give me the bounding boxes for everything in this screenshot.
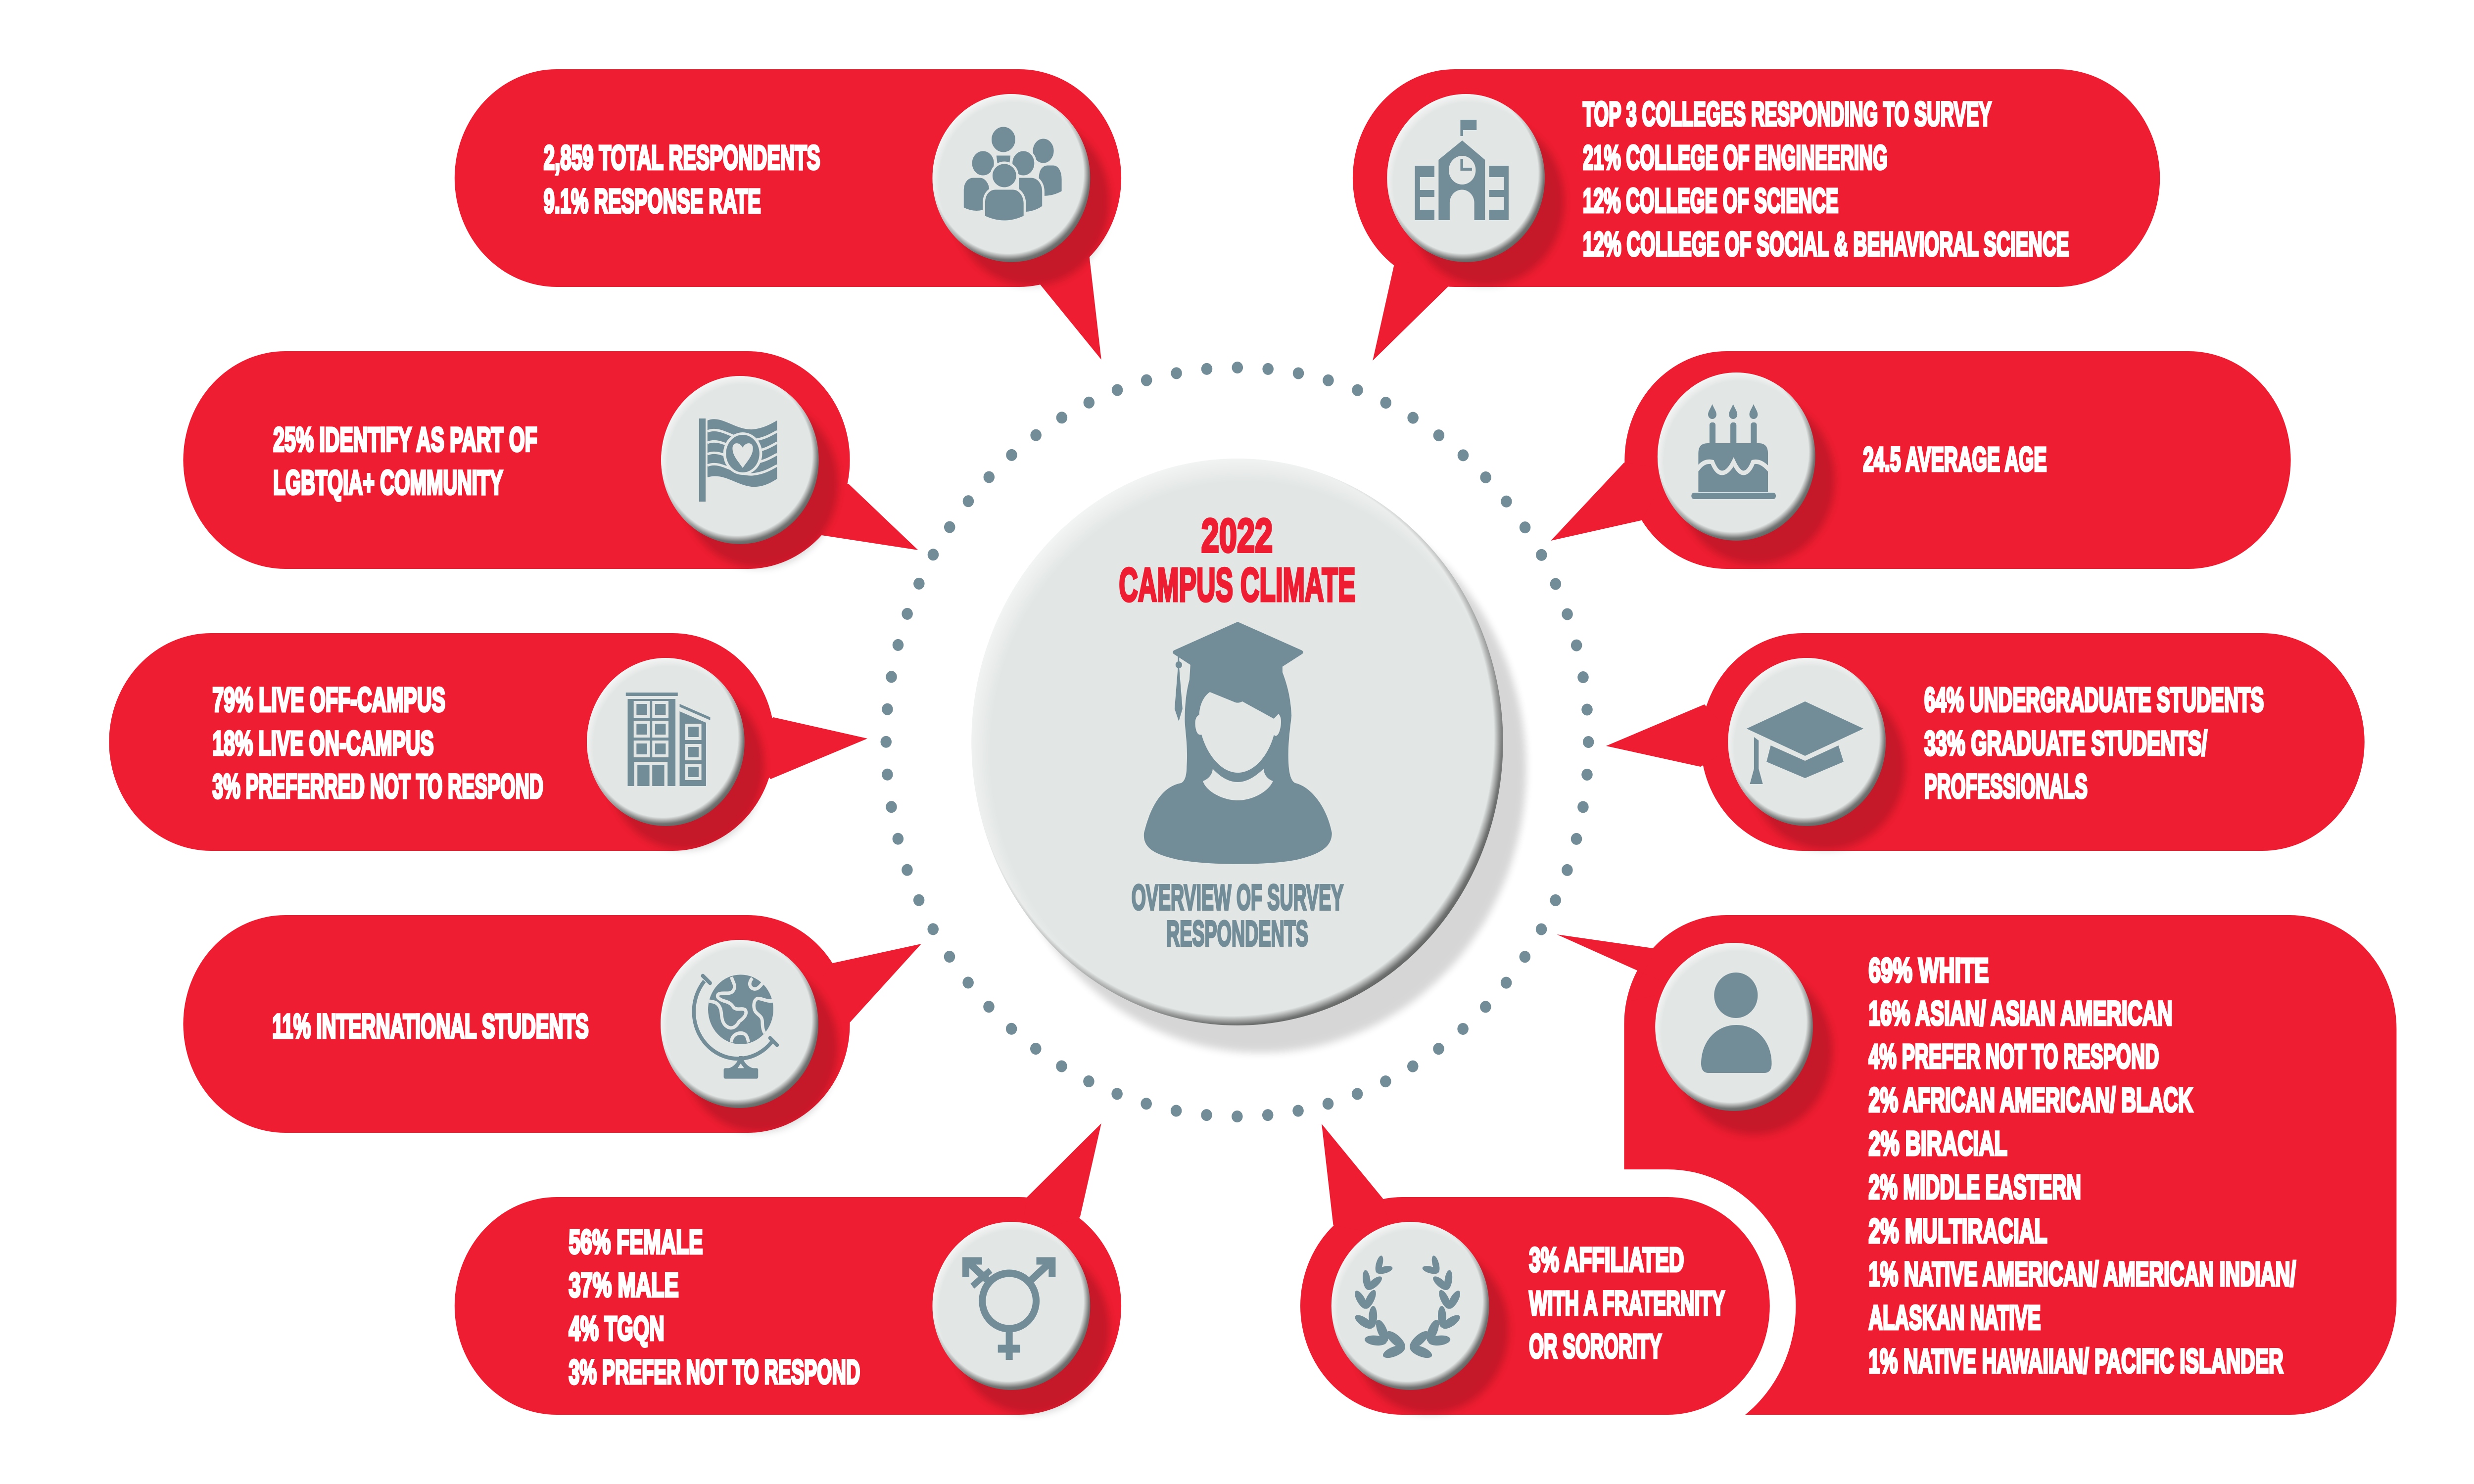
text: race and ethnicity: 2% AFRICAN AMERICAN/ BLACK (1868, 1081, 2193, 1119)
text: race and ethnicity: 2% MULTIRACIAL (1868, 1212, 2047, 1250)
speech bubble (1300, 1124, 1770, 1415)
text: respondents (544, 139, 820, 220)
panel: fraternity or sorority (1300, 1124, 1770, 1415)
text: student level: PROFESSIONALS (1924, 767, 2088, 805)
text: colleges: 12% COLLEGE OF SCIENCE (1583, 182, 1839, 220)
speech bubble (109, 633, 867, 851)
icon: college building (1387, 94, 1564, 286)
text: colleges: 21% COLLEGE OF ENGINEERING (1583, 139, 1888, 177)
icon: birthday cake (1658, 372, 1835, 564)
text: housing: 3% PREFERRED NOT TO RESPOND (212, 767, 543, 805)
speech bubble (1606, 633, 2365, 851)
icon: graduate (1144, 622, 1332, 864)
text: age: 24.5 AVERAGE AGE (1863, 440, 2047, 478)
speech bubble (1557, 915, 2396, 1415)
center disc (971, 459, 1526, 1053)
text: respondents: 2,859 TOTAL RESPONDENTS (544, 139, 820, 177)
panel: international students (183, 915, 921, 1133)
subtitle: OVERVIEW OF SURVEY (1132, 878, 1343, 917)
icon: apartment building (587, 658, 764, 850)
speech bubble (455, 1123, 1121, 1415)
title: 2022 (1201, 509, 1273, 562)
title: CAMPUS CLIMATE (1119, 558, 1356, 611)
speech bubble (1551, 351, 2291, 569)
panel: top colleges (1353, 69, 2160, 361)
icon: globe (661, 940, 838, 1132)
text: housing: 79% LIVE OFF-CAMPUS (212, 681, 445, 719)
icon: pride flag (661, 376, 838, 568)
icon: person (1655, 943, 1832, 1135)
text: race and ethnicity: 2% MIDDLE EASTERN (1868, 1168, 2081, 1206)
text: race and ethnicity: 2% BIRACIAL (1868, 1124, 2007, 1162)
text: fraternity or sorority: 3% AFFILIATED (1529, 1241, 1684, 1279)
icon: transgender symbol (932, 1222, 1110, 1414)
subtitle (1132, 878, 1343, 953)
text: LGBTQIA+: LGBTQIA+ COMMUNITY (273, 464, 503, 502)
text: colleges: TOP 3 COLLEGES RESPONDING TO SURVEY (1583, 95, 1992, 133)
panel: average age (1551, 351, 2291, 569)
panel: housing (109, 633, 867, 851)
text: colleges (1583, 95, 2069, 263)
icon: laurel wreath (1332, 1222, 1509, 1414)
text: colleges: 12% COLLEGE OF SOCIAL & BEHAVIORAL SCIENCE (1583, 225, 2069, 263)
text: gender: 4% TGQN (569, 1309, 665, 1347)
text: student level: 33% GRADUATE STUDENTS/ (1924, 724, 2207, 762)
text: LGBTQIA+ (273, 420, 537, 502)
text: race and ethnicity: 16% ASIAN/ ASIAN AMERICAN (1868, 994, 2173, 1032)
text: fraternity or sorority: OR SORORITY (1529, 1327, 1662, 1365)
text: race and ethnicity (1868, 951, 2296, 1380)
speech bubble (1353, 69, 2160, 361)
text: international: 11% INTERNATIONAL STUDENTS (272, 1007, 589, 1045)
panel: LGBTQIA+ (183, 351, 918, 569)
text: fraternity or sorority (1529, 1241, 1725, 1365)
text: race and ethnicity: 4% PREFER NOT TO RESPOND (1868, 1037, 2159, 1075)
text: gender (569, 1223, 860, 1391)
title (1119, 509, 1356, 611)
panel: student level (1606, 633, 2365, 851)
icon: people (932, 94, 1110, 286)
dotted ring around center (886, 368, 1588, 1116)
text: student level (1924, 681, 2264, 805)
text: fraternity or sorority: WITH A FRATERNITY (1529, 1284, 1725, 1322)
text: race and ethnicity: ALASKAN NATIVE (1868, 1298, 2041, 1337)
speech bubble (183, 915, 921, 1133)
panel: center circle (971, 459, 1526, 1053)
subtitle: RESPONDENTS (1166, 914, 1308, 953)
text: LGBTQIA+: 25% IDENTIFY AS PART OF (273, 420, 537, 459)
text: gender: 3% PREFER NOT TO RESPOND (569, 1353, 860, 1391)
panel: race and ethnicity (1557, 915, 2396, 1415)
text: respondents: 9.1% RESPONSE RATE (544, 182, 761, 220)
speech bubble (183, 351, 918, 569)
text: gender: 56% FEMALE (569, 1223, 703, 1261)
text: race and ethnicity: 69% WHITE (1868, 951, 1989, 989)
text: housing (212, 681, 543, 805)
text: student level: 64% UNDERGRADUATE STUDENTS (1924, 681, 2264, 719)
text: gender: 37% MALE (569, 1266, 679, 1304)
panel: gender (455, 1123, 1121, 1415)
text: housing: 18% LIVE ON-CAMPUS (212, 724, 434, 762)
speech bubble (455, 69, 1121, 360)
panel: total respondents (455, 69, 1121, 360)
icon: graduation cap (1728, 658, 1905, 850)
